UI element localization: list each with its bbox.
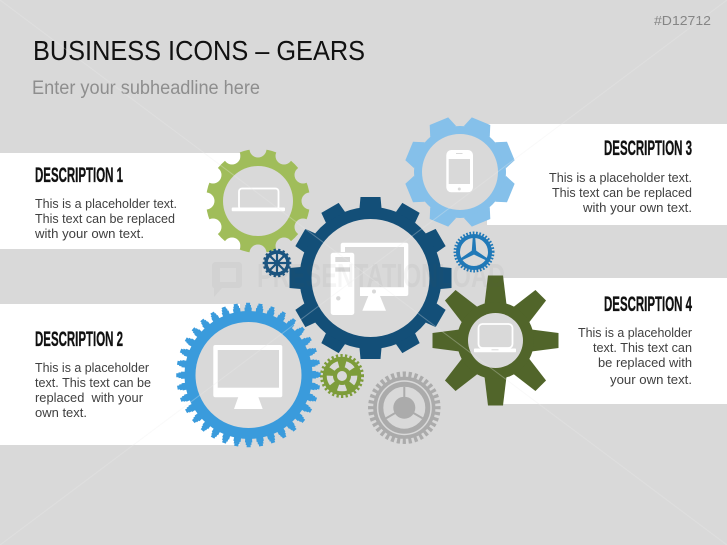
gear: small navy spoked <box>264 250 290 276</box>
body: description 4 <box>578 325 693 387</box>
body: description 2: text. This text can be <box>35 375 151 390</box>
body: description 3: This is a placeholder text. <box>549 170 692 185</box>
body: description 1: This is a placeholder text. <box>35 196 177 211</box>
watermark: wordmark: PRESENTATIONLOAD <box>257 257 505 294</box>
subheadline: Enter your subheadline here <box>32 78 260 99</box>
body: description 2: This is a placeholder <box>35 360 150 375</box>
icon: desktop computer <box>331 243 408 315</box>
body: description 1 <box>34 196 177 241</box>
body: description 3: This text can be replaced <box>552 185 692 200</box>
watermark: speech bubble logo <box>212 262 242 297</box>
icon: smartphone <box>446 150 473 192</box>
icon: laptop <box>232 188 285 211</box>
gear: light blue with smartphone <box>404 116 516 228</box>
body: description 3: with your own text. <box>582 200 692 215</box>
text block: description 2 <box>35 328 151 420</box>
body: description 2 <box>35 360 151 420</box>
band: description 2 <box>0 304 240 445</box>
text block: description 3 <box>549 137 692 215</box>
body: description 1: with your own text. <box>34 226 144 241</box>
icon: monitor <box>213 345 282 409</box>
title: BUSINESS ICONS – GEARS <box>33 35 365 66</box>
body: description 4: text. This text can <box>593 340 692 355</box>
body: description 2: replaced with your <box>35 390 144 405</box>
gear: grey with inner ring <box>371 374 438 441</box>
text block: description 1 <box>34 164 177 241</box>
body: description 4: be replaced with <box>598 355 692 370</box>
body: description 3 <box>549 170 692 215</box>
band: description 3 <box>487 124 727 225</box>
heading: description 2: DESCRIPTION 2 <box>35 328 123 351</box>
gear: navy with desktop computer <box>290 197 452 359</box>
band: description 1 <box>0 153 240 249</box>
heading: description 1: DESCRIPTION 1 <box>35 164 123 187</box>
gear: bright blue with monitor <box>178 304 320 446</box>
body: description 4: This is a placeholder <box>578 325 693 340</box>
gear: small green five-spoke <box>322 356 362 396</box>
band: description 4 <box>503 278 727 404</box>
body: description 1: This text can be replaced <box>35 211 175 226</box>
gear: small blue three-spoke <box>455 233 493 271</box>
gear: dark olive with laptop <box>432 276 558 406</box>
watermark <box>212 257 505 297</box>
document code: #D12712 <box>654 13 711 28</box>
icon: laptop <box>474 324 516 352</box>
gear: green with laptop <box>206 149 310 253</box>
body: description 2: own text. <box>35 405 87 420</box>
body: description 4: your own text. <box>610 372 692 387</box>
text block: description 4 <box>578 293 693 387</box>
